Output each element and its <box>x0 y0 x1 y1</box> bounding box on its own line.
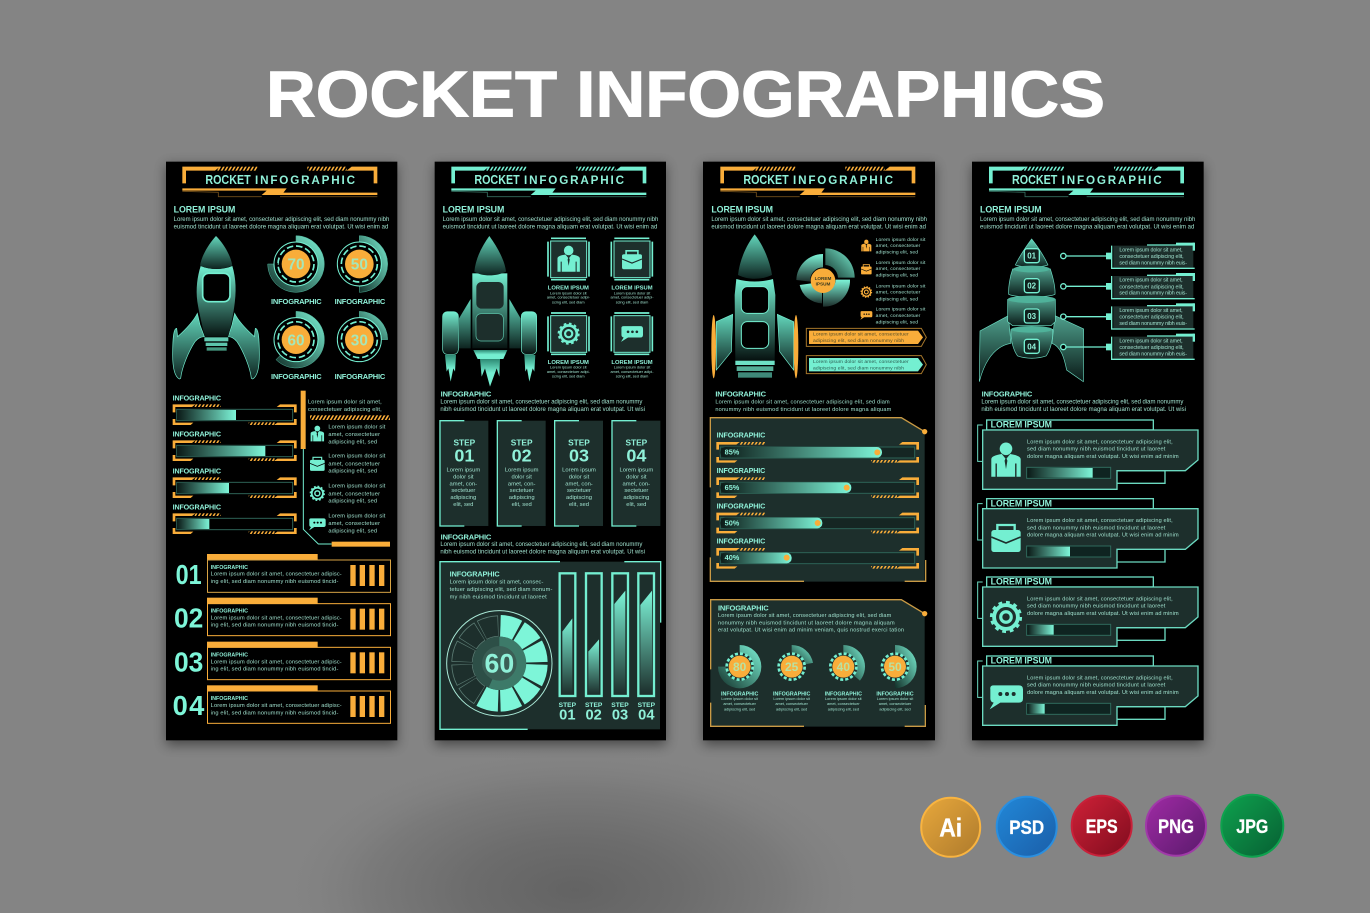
callout 03 <box>1061 303 1195 329</box>
donut 80: 80 <box>733 660 747 674</box>
donut 40: INFOGRAPHIC <box>825 692 862 698</box>
donut 50: INFOGRAPHIC <box>876 692 914 698</box>
info panel: gear: Lorem ipsum dolor sit amet, consectetuer adipiscing elit, <box>1027 596 1173 602</box>
card 1 header: INFOGRAPHIC <box>255 174 356 187</box>
percent bars panel <box>710 418 927 582</box>
step bar 03: STEP <box>611 702 629 709</box>
info panel: person <box>978 420 1198 489</box>
infographic text 1: Lorem ipsum dolor sit amet, consectetuer adipiscing elit, sed diam nonummy <box>440 400 642 406</box>
title: ROCKET INFOGRAPHICS <box>266 58 1105 130</box>
donut gauges panel: nonummy nibh euismod tincidunt ut laoreet dolore magna aliquam <box>718 620 895 626</box>
icon tile: gear: LOREM IPSUM <box>548 360 589 366</box>
infographic text: nibh euismod tincidunt ut laoreet dolore magna aliquam erat volutpat. Ut wisi <box>981 407 1186 413</box>
step 02 <box>497 421 546 526</box>
callout 02: consectetuer adipiscing elit, <box>1119 284 1184 290</box>
icon tile: chat: Lorem ipsum dolor sit <box>614 366 651 370</box>
step bar 03 <box>611 573 629 723</box>
callout 03: sed diam nonummy nibh euis- <box>1119 321 1187 327</box>
card 3 header: INFOGRAPHIC <box>793 174 894 187</box>
infographic text: Lorem ipsum dolor sit amet, consectetuer adipiscing elit, sed diam nonummy <box>981 400 1183 406</box>
percent bars panel: 85% <box>725 448 740 457</box>
infographic text: INFOGRAPHIC <box>715 390 767 399</box>
gauge 70: 70 <box>287 257 305 274</box>
orange icon list: amet, consectetuer <box>876 243 921 249</box>
step 04: Lorem ipsum <box>619 467 653 473</box>
info panel: person: sed diam nonummy nibh euismod tincidunt ut laoreet <box>1027 447 1166 453</box>
donut gauges panel: INFOGRAPHIC <box>718 603 769 612</box>
icon tile: chat: scing elit, sed diam <box>616 375 648 379</box>
dial and step bars panel: Lorem ipsum dolor sit amet, consec- <box>450 580 543 586</box>
step 03 <box>555 421 603 526</box>
orange icon list: adipiscing elit, sed <box>876 272 918 278</box>
rocket <box>173 236 259 379</box>
icon list: amet, consectetuer <box>328 491 380 497</box>
info panel: gear <box>978 577 1198 646</box>
orange icon list: Lorem ipsum dolor sit <box>876 237 926 243</box>
icon tile: person: amet, consectetuer adipi- <box>547 296 591 300</box>
panel: card 4 <box>972 162 1204 740</box>
numbered row 01: 01 <box>176 559 202 590</box>
card 1 intro text: LOREM IPSUM <box>174 204 235 214</box>
step 02: adipiscing <box>509 495 535 501</box>
donut 50 <box>876 645 917 711</box>
dial and step bars panel: INFOGRAPHIC <box>450 570 500 579</box>
numbered row 04 <box>173 685 390 723</box>
progress bars <box>173 394 297 534</box>
card 3 header: ROCKET <box>743 173 789 187</box>
step 01: 01 <box>454 446 474 466</box>
step bar 04: 04 <box>638 707 655 723</box>
infographic text 2: INFOGRAPHIC <box>441 532 492 541</box>
card 4 intro text: euismod tincidunt ut laoreet dolore magna aliquam erat volutpat. Ut wisi enim ad <box>980 225 1194 231</box>
numbered row 02: Lorem ipsum dolor sit amet, consectetuer adipisc- <box>211 615 342 621</box>
card 4 intro text <box>980 204 1195 231</box>
step 01: sectetuer <box>451 488 475 494</box>
donut gauges panel <box>710 599 927 727</box>
step bar 03: 03 <box>612 707 628 723</box>
card 4 header <box>989 167 1184 197</box>
arrow banner orange: adipiscing elit, sed diam nonummy nibh <box>813 338 904 344</box>
percent bars panel: 65% <box>725 483 740 492</box>
panel: card 1 <box>166 162 397 740</box>
orange icon list: adipiscing elit, sed <box>876 296 918 302</box>
callout 04: sed diam nonummy nibh euis- <box>1119 351 1187 357</box>
icon tile: briefcase: amet, consectetuer adipi- <box>611 296 654 300</box>
step 04: elit, sed <box>626 502 646 508</box>
progress bars: INFOGRAPHIC <box>173 430 221 438</box>
step bar 02: STEP <box>585 702 603 709</box>
progress bars: INFOGRAPHIC <box>173 504 221 512</box>
step bar 01: 01 <box>559 707 575 723</box>
step 01: elit, sed <box>453 502 473 508</box>
info panel: chat: dolore magna aliquam erat volutpat. Ut wisi enim ad minim <box>1027 690 1179 696</box>
gauge 60: INFOGRAPHIC <box>271 372 322 381</box>
numbered row 02: ing elit, sed diam nonummy nibh euismod tincid- <box>211 623 338 629</box>
infographic text 1: nibh euismod tincidunt ut laoreet dolore magna aliquam erat volutpat. Ut wisi <box>440 407 645 413</box>
card 3 intro text: euismod tincidunt ut laoreet dolore magna aliquam erat volutpat. Ut wisi enim ad <box>711 225 926 231</box>
numbered row 04: ing elit, sed diam nonummy nibh euismod tincid- <box>211 710 338 716</box>
info panel: briefcase <box>978 498 1198 568</box>
badge: JPG <box>1221 795 1283 857</box>
donut gauges panel: Lorem ipsum dolor sit amet, consectetuer adipiscing elit, sed diam <box>718 613 892 619</box>
badge: Ai: Ai <box>939 812 962 842</box>
icon list: Lorem ipsum dolor sit <box>328 484 386 490</box>
progress bars: INFOGRAPHIC <box>173 467 221 475</box>
step bar 02 <box>585 573 603 723</box>
donut 80: INFOGRAPHIC <box>721 692 758 698</box>
callout 01: consectetuer adipiscing elit, <box>1119 254 1184 260</box>
card 4 intro text: Lorem ipsum dolor sit amet, consectetuer adipiscing elit, sed diam nonummy nibh <box>980 217 1195 223</box>
arrow banner orange <box>806 328 926 346</box>
card 2 intro text: LOREM IPSUM <box>443 204 504 214</box>
gauge 70: INFOGRAPHIC <box>271 297 322 306</box>
step 03: STEP <box>568 438 590 448</box>
donut 25 <box>773 645 813 711</box>
info panel: briefcase: dolore magna aliquam erat volutpat. Ut wisi enim ad minim <box>1027 533 1179 539</box>
donut 50: adipiscing elit, sed <box>879 707 911 711</box>
orange icon list: Lorem ipsum dolor sit <box>876 307 926 313</box>
badge: PNG: PNG <box>1158 816 1194 838</box>
step bar 04 <box>638 573 656 723</box>
dial and step bars panel <box>440 562 661 729</box>
badge: Ai <box>921 798 980 857</box>
step 02: Lorem ipsum <box>505 467 539 473</box>
step 04: amet, con- <box>623 481 650 487</box>
step 03: amet, con- <box>565 481 593 487</box>
callout 01: sed diam nonummy nibh euis- <box>1119 260 1187 266</box>
icon tile: briefcase: LOREM IPSUM <box>611 286 653 292</box>
info panel: person: Lorem ipsum dolor sit amet, consectetuer adipiscing elit, <box>1027 439 1173 445</box>
arrow banner mint <box>806 356 926 374</box>
percent bars panel: 50% <box>725 518 740 527</box>
icon tile: gear: amet, consectetuer adipi- <box>547 370 591 374</box>
info panel: gear: sed diam nonummy nibh euismod tincidunt ut laoreet <box>1027 604 1166 610</box>
rocket <box>443 236 537 387</box>
step 02: elit, sed <box>512 502 532 508</box>
infographic text <box>981 390 1186 413</box>
infographic text: nonummy nibh euismod tincidunt ut laoreet dolore magna aliquam <box>715 407 892 413</box>
icon tile: person <box>547 238 591 304</box>
info panel: chat <box>978 656 1198 725</box>
donut 80: amet, consectetuer <box>723 702 757 706</box>
info panel: briefcase: LOREM IPSUM <box>991 498 1052 508</box>
donut 80: Lorem ipsum dolor sit <box>721 697 759 701</box>
card 4 header: INFOGRAPHIC <box>1062 174 1162 187</box>
step bar 01 <box>559 573 577 723</box>
donut 25: adipiscing elit, sed <box>776 707 807 711</box>
numbered row 01 <box>176 554 390 592</box>
badge: EPS <box>1072 796 1132 856</box>
card 3 intro text: Lorem ipsum dolor sit amet, consectetuer adipiscing elit, sed diam nonummy nibh <box>711 217 927 223</box>
step 04: sectetuer <box>624 488 648 494</box>
badge: PNG <box>1146 796 1206 856</box>
card 4 intro text: LOREM IPSUM <box>980 204 1042 214</box>
orange icon list <box>860 237 926 325</box>
icon tile: briefcase <box>611 238 654 304</box>
badge numbers <box>1027 252 1037 351</box>
icon tile: gear <box>547 313 591 379</box>
card 2 intro text: euismod tincidunt ut laoreet dolore magna aliquam erat volutpat. Ut wisi enim ad <box>443 225 657 231</box>
donut 40: Lorem ipsum dolor sit <box>825 697 863 701</box>
gauge 30 <box>335 311 388 381</box>
info panel: chat: LOREM IPSUM <box>991 656 1052 666</box>
donut 40: adipiscing elit, sed <box>828 707 859 711</box>
numbered row 01: Lorem ipsum dolor sit amet, consectetuer adipisc- <box>211 572 342 578</box>
orange icon list: amet, consectetuer <box>876 266 921 272</box>
numbered row 03: INFOGRAPHIC <box>211 652 248 658</box>
arrow banner orange: Lorem ipsum dolor sit amet, consectetuer <box>813 332 909 338</box>
numbered row 04: 04 <box>173 690 205 721</box>
infographic text: Lorem ipsum dolor sit amet, consectetuer adipiscing elit, sed diam <box>715 400 890 406</box>
donut 40: amet, consectetuer <box>827 702 860 706</box>
step 04: STEP <box>625 438 648 448</box>
info panel: chat: Lorem ipsum dolor sit amet, consectetuer adipiscing elit, <box>1027 675 1173 681</box>
callout 03: Lorem ipsum dolor sit amet, <box>1119 308 1183 314</box>
icon list: adipiscing elit, sed <box>328 528 377 534</box>
donut 25: 25 <box>785 660 799 674</box>
infographic text 2: nibh euismod tincidunt ut laoreet dolore magna aliquam erat volutpat. Ut wisi <box>440 549 645 555</box>
step 02: STEP <box>511 438 533 448</box>
donut 25: amet, consectetuer <box>775 702 809 706</box>
info panel: person: dolore magna aliquam erat volutpat. Ut wisi enim ad minim <box>1027 454 1179 460</box>
orange icon list: Lorem ipsum dolor sit <box>876 284 926 290</box>
badge numbers: 03 <box>1027 312 1037 321</box>
donut 25: Lorem ipsum dolor sit <box>773 697 811 701</box>
card 3 header <box>720 167 915 197</box>
card 2 intro text <box>443 204 658 231</box>
step 02: amet, con- <box>508 481 535 487</box>
card 1 header: ROCKET <box>205 173 251 187</box>
card 2 header <box>451 167 646 197</box>
icon list: amet, consectetuer <box>328 461 380 467</box>
orange icon list: adipiscing elit, sed <box>876 319 918 325</box>
numbered row 03: Lorem ipsum dolor sit amet, consectetuer adipisc- <box>211 659 342 665</box>
badge numbers: 02 <box>1027 282 1037 291</box>
card 3 intro text: LOREM IPSUM <box>711 204 773 214</box>
icon list <box>301 391 390 547</box>
donut 40: 40 <box>837 660 850 674</box>
step 01 <box>440 421 488 526</box>
card 1 intro text <box>174 204 389 231</box>
icon tile: person: scing elit, sed diam <box>552 300 585 304</box>
info panel: gear: LOREM IPSUM <box>991 577 1052 587</box>
donut 25: INFOGRAPHIC <box>773 692 810 698</box>
step 03: sectetuer <box>567 488 591 494</box>
step 03: adipiscing <box>566 495 592 501</box>
panel: card 2 <box>435 162 666 740</box>
card 3 intro text <box>711 204 927 231</box>
step 04 <box>612 421 660 526</box>
infographic text 1 <box>440 390 645 413</box>
orange icon list: Lorem ipsum dolor sit <box>876 260 926 266</box>
donut 50: amet, consectetuer <box>879 702 912 706</box>
icon tile: gear: Lorem ipsum dolor sit <box>550 366 588 370</box>
donut 50: 50 <box>888 660 902 674</box>
icon list: Lorem ipsum dolor sit amet, <box>308 400 382 406</box>
orange icon list: adipiscing elit, sed <box>876 249 918 255</box>
info panel: person: LOREM IPSUM <box>991 420 1052 430</box>
step 04: adipiscing <box>623 495 649 501</box>
card 1 intro text: euismod tincidunt ut laoreet dolore magna aliquam erat volutpat. Ut wisi enim ad <box>174 225 388 231</box>
card 1 header <box>182 167 377 197</box>
step bar 01: STEP <box>559 702 577 709</box>
icon tile: briefcase: scing elit, sed diam <box>616 300 648 304</box>
step bar 02: 02 <box>586 707 602 723</box>
donut 80: adipiscing elit, sed <box>724 707 755 711</box>
infographic text 2: Lorem ipsum dolor sit amet, consectetuer adipiscing elit, sed diam nonummy <box>440 542 642 548</box>
icon list: consectetuer adipiscing elit, <box>308 407 382 413</box>
step 03: Lorem ipsum <box>562 467 596 473</box>
card 2 header: INFOGRAPHIC <box>524 174 625 187</box>
info panel: chat: sed diam nonummy nibh euismod tincidunt ut laoreet <box>1027 683 1166 689</box>
badges <box>1024 249 1039 353</box>
infographic text <box>715 390 892 413</box>
segmented rocket <box>979 239 1084 382</box>
percent bars panel: INFOGRAPHIC <box>717 467 765 475</box>
gauge 50: 50 <box>351 257 368 274</box>
numbered row 02: 02 <box>174 603 203 634</box>
icon list: Lorem ipsum dolor sit <box>328 454 386 460</box>
rocket <box>711 234 798 378</box>
callout 04: Lorem ipsum dolor sit amet, <box>1119 338 1183 344</box>
step 01: dolor sit <box>453 474 474 480</box>
numbered row 02: INFOGRAPHIC <box>211 609 248 615</box>
step 04: dolor sit <box>626 474 647 480</box>
orange icon list: amet, consectetuer <box>876 290 921 296</box>
icon tile: chat: amet, consectetuer adipi- <box>611 370 654 374</box>
callout 01 <box>1061 243 1195 268</box>
icon tile: chat <box>611 313 654 379</box>
gauge 70 <box>268 236 324 306</box>
segmented pie: IPSUM <box>816 281 830 286</box>
info panel: briefcase: sed diam nonummy nibh euismod tincidunt ut laoreet <box>1027 525 1166 531</box>
numbered row 03: ing elit, sed diam nonummy nibh euismod tincid- <box>211 666 338 672</box>
arrow banner mint: adipiscing elit, sed diam nonummy nibh <box>813 365 904 371</box>
badge numbers: 04 <box>1027 342 1037 351</box>
step bar 04: STEP <box>638 702 656 709</box>
step 02: sectetuer <box>510 488 534 494</box>
step 02: dolor sit <box>511 474 532 480</box>
dial and step bars panel: my nibh euismod tincidunt ut laoreet <box>450 594 547 600</box>
step 03: 03 <box>569 446 589 466</box>
step 01: Lorem ipsum <box>446 467 480 473</box>
infographic text: INFOGRAPHIC <box>982 390 1033 399</box>
icon tile: person: Lorem ipsum dolor sit <box>550 291 588 295</box>
step 01: adipiscing <box>450 495 476 501</box>
step 01: STEP <box>453 438 476 448</box>
callout 01: Lorem ipsum dolor sit amet, <box>1119 247 1183 253</box>
donut 50: Lorem ipsum dolor sit <box>877 697 914 701</box>
numbered row 04: INFOGRAPHIC <box>211 696 248 702</box>
donut gauges panel: erat volutpat. Ut wisi enim ad minim veniam, quis nostrud exerci tation <box>718 628 904 634</box>
infographic text 2 <box>440 532 645 555</box>
donut 40 <box>825 645 865 711</box>
callout 02: sed diam nonummy nibh euis- <box>1119 291 1187 297</box>
icon list: adipiscing elit, sed <box>328 469 377 475</box>
card 1 intro text: Lorem ipsum dolor sit amet, consectetuer adipiscing elit, sed diam nonummy nibh <box>174 217 389 223</box>
icon tile: person: LOREM IPSUM <box>548 286 589 292</box>
infographic text 1: INFOGRAPHIC <box>441 390 492 399</box>
percent bars panel: INFOGRAPHIC <box>717 537 765 545</box>
badge numbers: 01 <box>1027 252 1037 261</box>
icon list: amet, consectetuer <box>328 521 380 527</box>
callout 04 <box>1061 334 1195 359</box>
icon list: adipiscing elit, sed <box>328 439 377 445</box>
step 03: elit, sed <box>569 502 589 508</box>
card 2 intro text: Lorem ipsum dolor sit amet, consectetuer adipiscing elit, sed diam nonummy nibh <box>443 217 658 223</box>
badge: JPG: JPG <box>1236 816 1268 838</box>
icon list: amet, consectetuer <box>328 432 380 438</box>
arrow banner mint: Lorem ipsum dolor sit amet, consectetuer <box>813 359 909 365</box>
numbered row 03: 03 <box>174 646 203 677</box>
gauge 60 <box>271 311 324 381</box>
donut 80 <box>718 645 761 711</box>
panel: card 3 <box>703 162 935 740</box>
badge: PSD: PSD <box>1009 817 1044 839</box>
icon list: Lorem ipsum dolor sit <box>328 513 386 519</box>
step 04: 04 <box>626 446 646 466</box>
numbered row 02 <box>174 598 390 636</box>
card 4 header: ROCKET <box>1012 173 1058 187</box>
icon tile: chat: LOREM IPSUM <box>611 360 653 366</box>
percent bars panel: INFOGRAPHIC <box>717 432 765 440</box>
gauge 50 <box>335 236 388 306</box>
numbered row 04: Lorem ipsum dolor sit amet, consectetuer adipisc- <box>211 703 342 709</box>
segmented pie: LOREM <box>815 276 832 281</box>
radial gauge 60 <box>447 611 552 716</box>
gauge 30: INFOGRAPHIC <box>335 372 386 381</box>
icon list: adipiscing elit, sed <box>328 499 377 505</box>
segmented pie <box>796 248 855 307</box>
gauge 30: 30 <box>351 332 368 349</box>
callout 03: consectetuer adipiscing elit, <box>1119 315 1184 321</box>
percent bars panel: INFOGRAPHIC <box>717 502 765 510</box>
step 03: dolor sit <box>569 474 590 480</box>
info panel: briefcase: Lorem ipsum dolor sit amet, consectetuer adipiscing elit, <box>1027 518 1173 524</box>
icon list: Lorem ipsum dolor sit <box>328 424 386 430</box>
numbered row 03 <box>174 642 390 680</box>
icon tile: briefcase: Lorem ipsum dolor sit <box>614 291 651 295</box>
orange icon list: amet, consectetuer <box>876 313 921 319</box>
callout 02: Lorem ipsum dolor sit amet, <box>1119 278 1183 284</box>
radial gauge 60: 60 <box>485 649 514 679</box>
gauge 50: INFOGRAPHIC <box>335 297 386 306</box>
badge: EPS: EPS <box>1086 816 1118 838</box>
info panel: gear: dolore magna aliquam erat volutpat. Ut wisi enim ad minim <box>1027 611 1179 617</box>
icon tile: gear: scing elit, sed diam <box>552 375 585 379</box>
numbered row 01: ing elit, sed diam nonummy nibh euismod tincid- <box>211 579 338 585</box>
card 2 header: ROCKET <box>474 173 520 187</box>
callout 02 <box>1061 273 1195 299</box>
badge: PSD <box>997 797 1057 857</box>
callout 04: consectetuer adipiscing elit, <box>1119 345 1184 351</box>
gauge 60: 60 <box>287 332 305 349</box>
progress bars: INFOGRAPHIC <box>173 394 221 402</box>
dial and step bars panel: tetuer adipiscing elit, sed diam nonum- <box>450 587 552 593</box>
step 02: 02 <box>512 446 532 466</box>
numbered row 01: INFOGRAPHIC <box>211 565 248 571</box>
percent bars panel: 40% <box>725 553 740 562</box>
step 01: amet, con- <box>450 481 477 487</box>
